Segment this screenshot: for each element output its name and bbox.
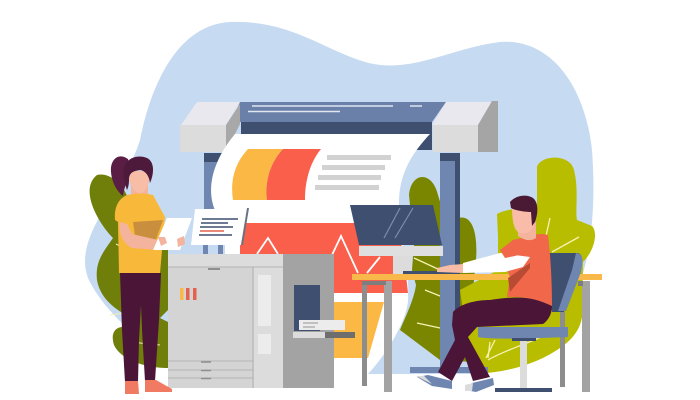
dark slot: [294, 285, 320, 331]
sleeve / arm: [463, 253, 530, 273]
neck and face: [518, 222, 536, 240]
man: [416, 196, 552, 392]
chart line: [257, 236, 380, 273]
red block: [266, 149, 321, 200]
shirt: [115, 194, 165, 273]
sleeve shadow: [508, 263, 530, 292]
shoes: [417, 375, 452, 389]
left arm: [120, 222, 164, 250]
plant: olive behind printer leg: [400, 177, 476, 362]
indicator lights: [180, 288, 196, 300]
pants: [120, 273, 161, 382]
shirt: [502, 234, 552, 306]
orange block: [232, 149, 283, 200]
left leg: [204, 153, 224, 223]
printed paper sheet: [211, 134, 430, 374]
side panels: [258, 275, 271, 326]
orange panel: [240, 302, 384, 358]
monitor: [350, 205, 458, 274]
ponytail: [111, 156, 132, 196]
pants: [438, 298, 552, 381]
folder: [133, 220, 163, 248]
paper tray: [299, 320, 345, 330]
desk: [352, 274, 602, 392]
text lines: [315, 158, 391, 188]
hands: [158, 237, 167, 246]
neck and face: [131, 182, 148, 202]
plant: left behind woman: [90, 174, 168, 368]
hair: [510, 196, 537, 226]
background blob: [85, 22, 593, 374]
red panel: [240, 223, 408, 293]
hair: [124, 156, 153, 190]
clipboard: [153, 218, 192, 250]
keyboard: [403, 271, 458, 274]
woman: [111, 156, 192, 394]
drawer handles: [201, 362, 211, 378]
right leg: [440, 153, 455, 368]
printer head: [180, 101, 498, 152]
copier machine: [168, 254, 355, 388]
foot: [410, 367, 488, 373]
plant: lime behind man: [460, 158, 595, 374]
printer stand: [204, 153, 488, 373]
shoes: [125, 381, 139, 394]
control screen: [191, 208, 249, 254]
chair: [478, 253, 582, 392]
